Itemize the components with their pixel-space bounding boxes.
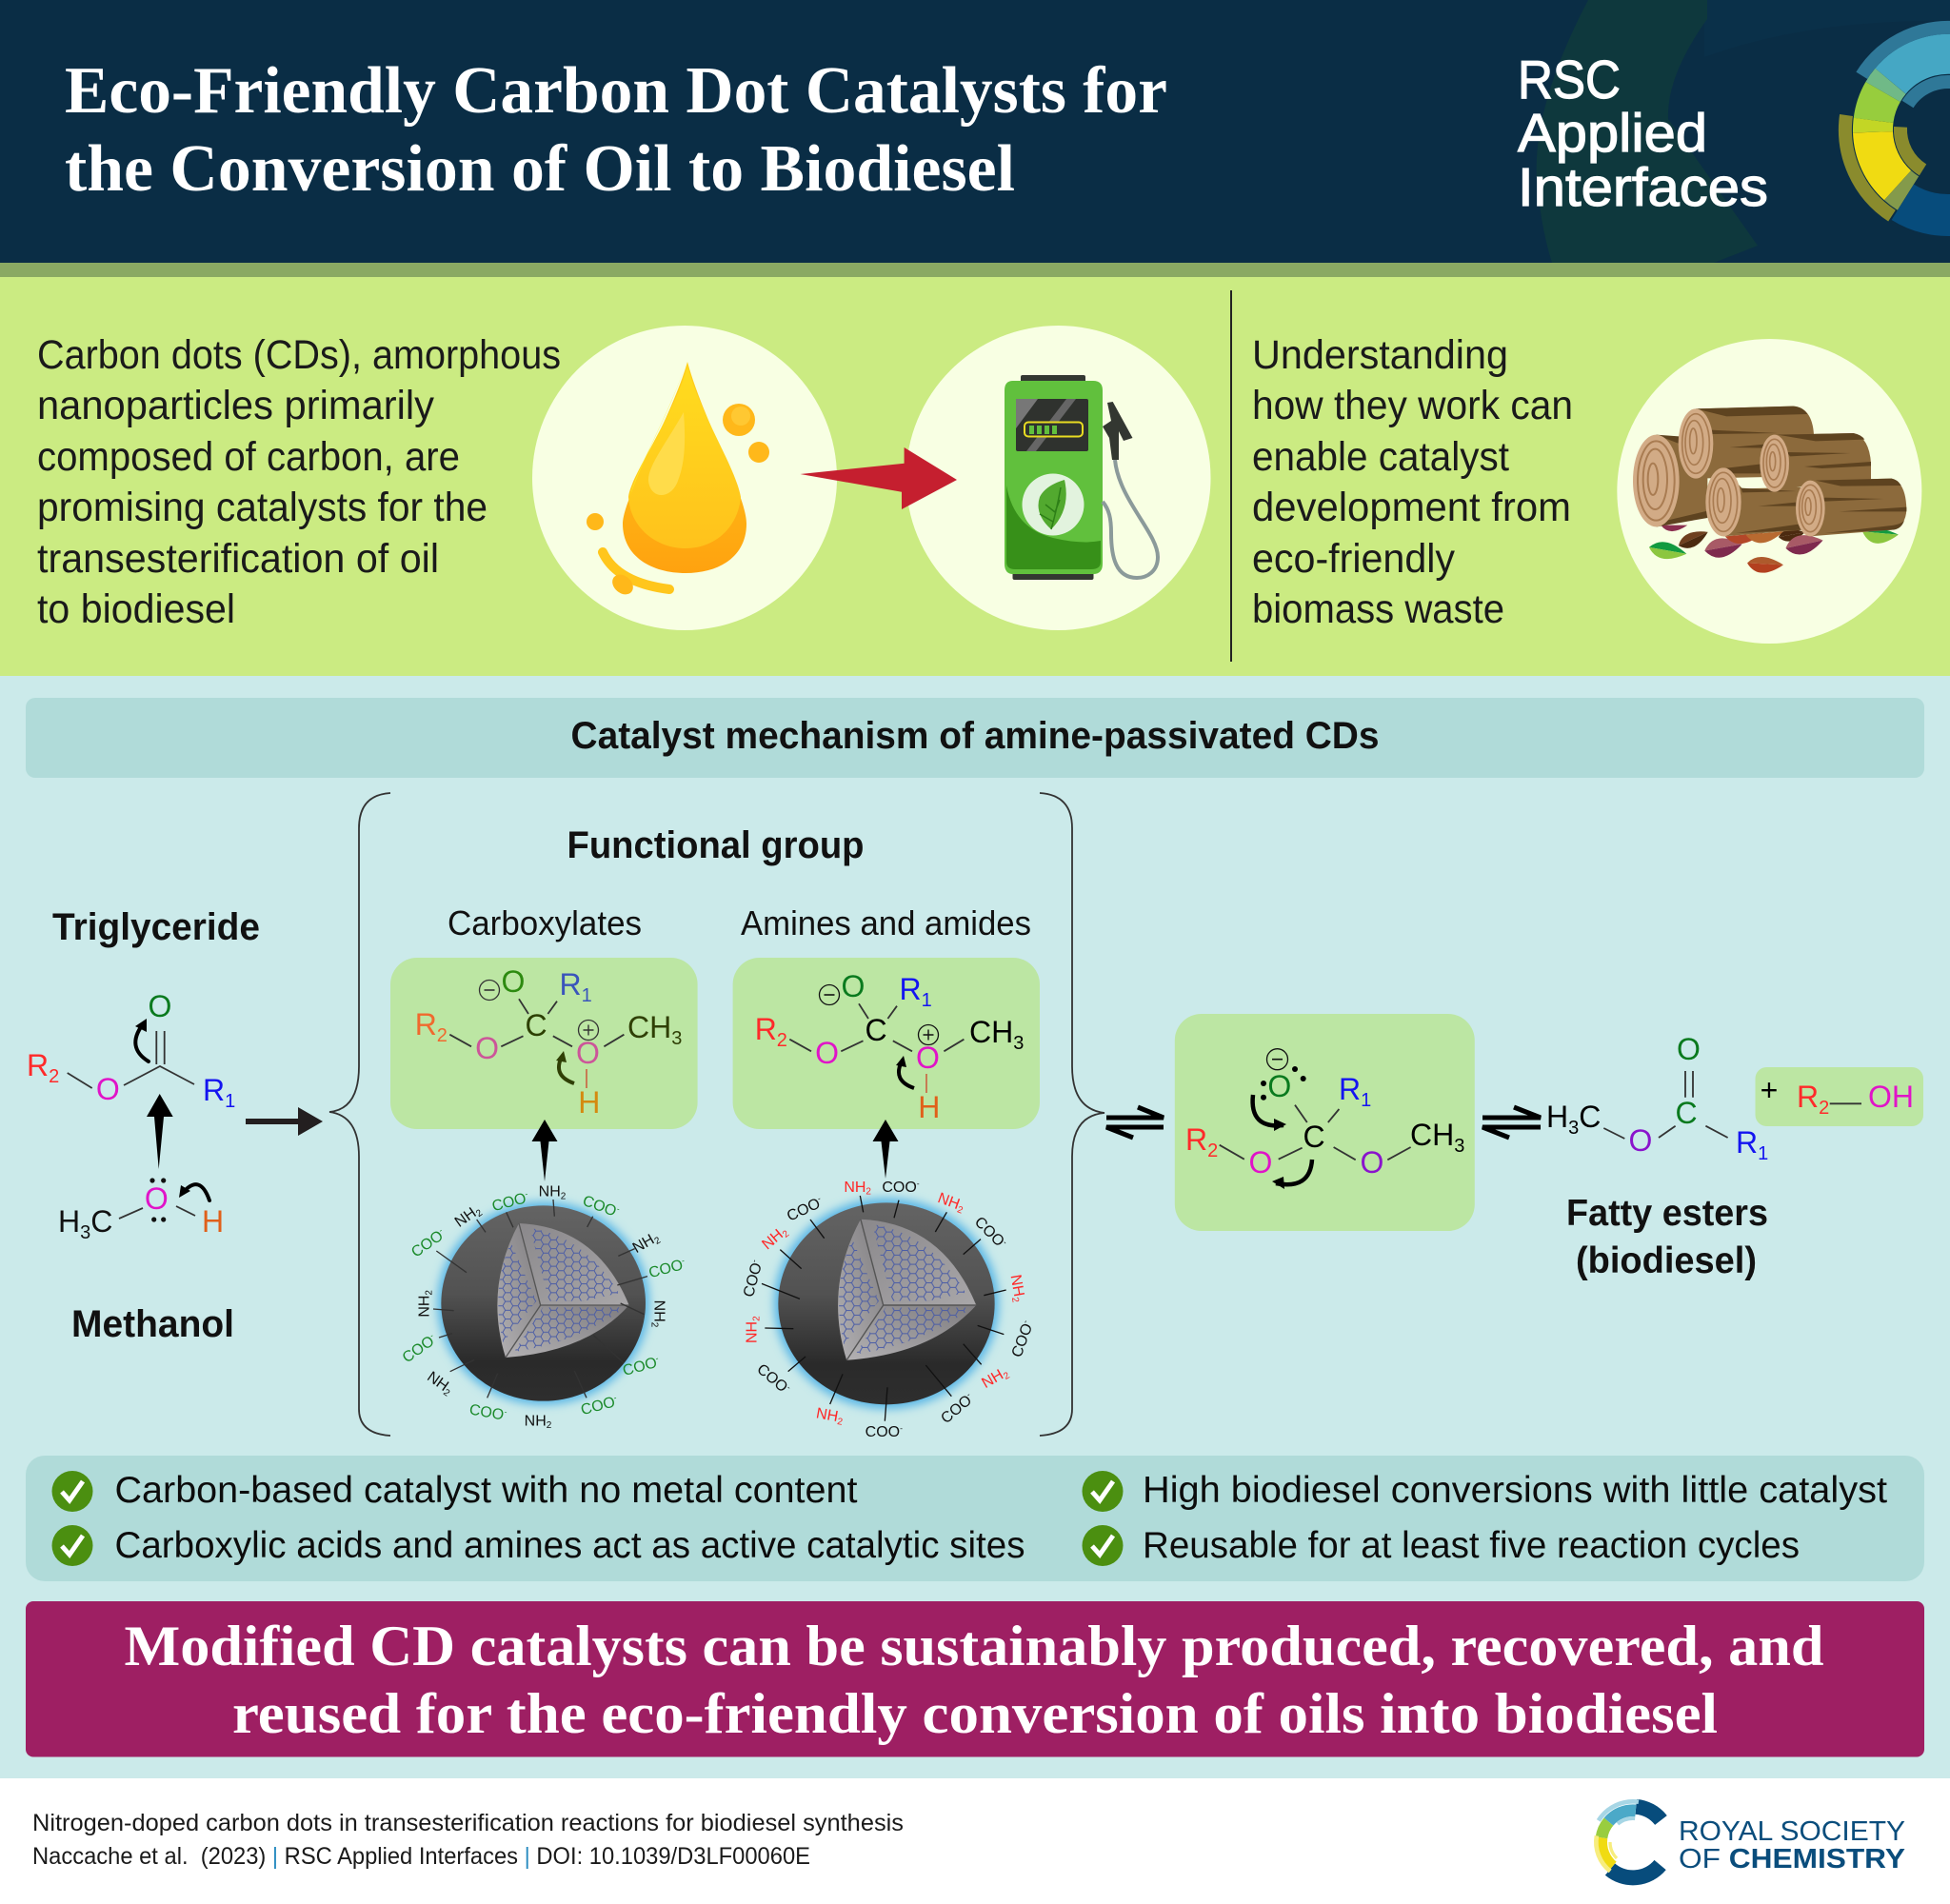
panel: tetrahedral intermediate: 1 bbox=[1361, 1090, 1371, 1111]
label: triglyceride: Triglyceride bbox=[52, 906, 260, 948]
panel: carboxylate intermediate: O bbox=[502, 964, 525, 999]
arrow: methanol attacks carbonyl bbox=[147, 1094, 173, 1169]
panel: tetrahedral intermediate: R bbox=[1185, 1122, 1207, 1157]
panel: tetrahedral intermediate: O bbox=[1267, 1069, 1291, 1103]
arrow: carboxylate carbon dot to intermediate bbox=[531, 1120, 558, 1181]
title bbox=[65, 54, 1167, 206]
carbon dot: red amine labels: COO bbox=[753, 1361, 790, 1396]
carbon dot: green carboxylate labels: - bbox=[615, 1204, 622, 1214]
molecule: methanol: H bbox=[58, 1204, 80, 1239]
carbon dot: red amine labels: COO bbox=[741, 1261, 766, 1299]
citation: Naccache et al. (2023) | RSC Applied Interfaces | DOI: 10.1039/D3LF00060E bbox=[32, 1843, 810, 1870]
panel: amine intermediate: 2 bbox=[777, 1030, 787, 1051]
citation bbox=[32, 1810, 904, 1870]
carbon dot: red amine labels: 2 bbox=[1009, 1297, 1021, 1304]
logo: Royal Society of Chemistry: ROYAL SOCIETY bbox=[1679, 1816, 1905, 1847]
carbon dot: green carboxylate labels: NH bbox=[424, 1369, 451, 1395]
carbon dot: red amine labels: 2 bbox=[751, 1316, 762, 1321]
panel: mechanism background bbox=[0, 676, 1950, 1778]
label: fatty esters biodiesel: Fatty esters bbox=[1566, 1193, 1768, 1234]
carbon dot: green carboxylate labels: 2 bbox=[653, 1235, 663, 1247]
carbon dot: red amine labels: NH bbox=[844, 1180, 866, 1196]
icon: oil drop in circle bbox=[532, 326, 837, 630]
carbon dot: red amine labels: COO bbox=[971, 1214, 1007, 1250]
panel: carboxylate intermediate: 2 bbox=[437, 1025, 448, 1046]
panel: amine intermediate: CH bbox=[969, 1015, 1013, 1049]
heading: catalyst mechanism bbox=[26, 698, 1924, 778]
arrow: amine carbon dot to intermediate bbox=[872, 1120, 899, 1179]
molecule: methanol bbox=[58, 1178, 224, 1243]
molecule: fatty ester: 3 bbox=[1568, 1118, 1579, 1139]
carbon dot: green carboxylate labels: COO bbox=[621, 1355, 659, 1379]
carbon dot: green carboxylate labels: - bbox=[524, 1189, 528, 1199]
carbon dot: red amine labels: 2 bbox=[956, 1204, 965, 1217]
panel: carboxylate intermediate: O bbox=[576, 1036, 600, 1070]
text block: carbon dots intro: composed of carbon, are bbox=[37, 434, 460, 480]
text block: carbon dots intro: nanoparticles primarily bbox=[37, 383, 434, 428]
heading: catalyst mechanism: Catalyst mechanism of amine-passivated CDs bbox=[571, 715, 1379, 757]
panel: tetrahedral intermediate: C bbox=[1303, 1120, 1325, 1154]
carbon dot: red amine labels: NH bbox=[935, 1190, 962, 1213]
panel: key benefits bbox=[26, 1456, 1924, 1581]
arrow: reactants to catalyst bbox=[246, 1107, 323, 1136]
label: methanol: Methanol bbox=[71, 1303, 234, 1345]
divider bbox=[1230, 290, 1232, 662]
carbon dot: green carboxylate labels: - bbox=[681, 1256, 686, 1265]
label: fatty esters biodiesel bbox=[1566, 1193, 1768, 1281]
panel: carboxylate intermediate: R bbox=[560, 967, 582, 1002]
carbon dot: red amine labels: NH bbox=[745, 1321, 761, 1343]
carbon dot: red amine labels: COO bbox=[882, 1180, 917, 1196]
text block: biomass waste: biomass waste bbox=[1252, 586, 1504, 632]
molecule: fatty ester: C bbox=[1675, 1096, 1698, 1130]
banner: conclusion bbox=[26, 1601, 1924, 1757]
carbon dot: red amine labels: NH bbox=[979, 1367, 1006, 1392]
panel: amine intermediate: 1 bbox=[922, 990, 932, 1011]
panel: amine intermediate: O bbox=[916, 1041, 940, 1075]
journal name: RSC Applied Interfaces: RSC bbox=[1518, 50, 1621, 110]
molecule: methanol: 3 bbox=[80, 1222, 90, 1243]
carbon dot: green carboxylate labels: COO bbox=[647, 1257, 685, 1281]
text block: carbon dots intro bbox=[37, 332, 561, 632]
benefit: active sites: Carboxylic acids and amines act as active catalytic sites bbox=[114, 1525, 1025, 1566]
panel: carboxylate intermediate: O bbox=[475, 1031, 499, 1065]
carbon dot: red amine labels: - bbox=[917, 1179, 920, 1188]
carbon dot: green carboxylate labels: - bbox=[504, 1407, 508, 1417]
panel: tetrahedral intermediate: R bbox=[1339, 1072, 1361, 1106]
molecule: fatty ester: 1 bbox=[1758, 1143, 1768, 1164]
carbon dot: red amine labels bbox=[740, 1179, 1037, 1440]
panel: amine intermediate: 3 bbox=[1013, 1033, 1024, 1054]
panel: carboxylate intermediate: C bbox=[525, 1008, 547, 1042]
panel: carboxylate intermediate: 3 bbox=[671, 1028, 682, 1049]
banner: conclusion: reused for the eco-friendly conversion of oils into biodiesel bbox=[232, 1682, 1718, 1745]
benefit: high conversions: High biodiesel conversions with little catalyst bbox=[1143, 1470, 1887, 1511]
carbon dot: red amine labels: 2 bbox=[781, 1228, 792, 1240]
molecule: fatty ester: H bbox=[1546, 1100, 1568, 1134]
carbon dot: green carboxylate labels: COO bbox=[580, 1193, 619, 1220]
panel: carboxylate intermediate: R bbox=[415, 1007, 437, 1041]
text block: biomass waste: enable catalyst bbox=[1252, 434, 1509, 480]
carbon dot: red amine labels: COO bbox=[785, 1196, 823, 1225]
carbon dot: green carboxylate labels: 2 bbox=[561, 1191, 567, 1201]
carbon dot: green carboxylate labels: 2 bbox=[547, 1420, 552, 1431]
panel: carboxylate intermediate: H bbox=[578, 1085, 600, 1120]
carbon dot: green carboxylate labels: 2 bbox=[649, 1322, 660, 1328]
label: amines and amides: Amines and amides bbox=[741, 903, 1031, 942]
text block: biomass waste: how they work can bbox=[1252, 383, 1573, 428]
carbon dot: green carboxylate labels: 2 bbox=[474, 1207, 485, 1220]
carbon dot: red amine labels: - bbox=[748, 1259, 759, 1263]
text block: carbon dots intro: transesterification of oil bbox=[37, 536, 439, 582]
panel: tetrahedral intermediate: CH bbox=[1410, 1118, 1454, 1152]
molecule: triglyceride: R bbox=[27, 1048, 49, 1082]
carbon dot: red amine labels: - bbox=[785, 1382, 793, 1392]
title: Eco-Friendly Carbon Dot Catalysts for bbox=[65, 54, 1167, 128]
panel: tetrahedral intermediate bbox=[1175, 1014, 1475, 1231]
header band bbox=[0, 0, 1950, 277]
carbon dot: green carboxylate labels: COO bbox=[468, 1401, 505, 1424]
carbon dot: green carboxylate labels: NH bbox=[630, 1232, 657, 1257]
carbon dot: green carboxylate labels: COO bbox=[579, 1394, 617, 1418]
carbon dot: green carboxylate labels: NH bbox=[650, 1300, 667, 1322]
molecule: methanol: H bbox=[202, 1204, 224, 1239]
molecule: triglyceride: 2 bbox=[49, 1066, 59, 1087]
panel: carboxylate intermediate: 1 bbox=[582, 985, 592, 1006]
banner: conclusion: Modified CD catalysts can be sustainably produced, recovered, and bbox=[124, 1615, 1824, 1677]
molecule: fatty ester bbox=[1546, 1032, 1768, 1164]
arrow: equilibrium one bbox=[1106, 1107, 1164, 1138]
carbon dot: green carboxylate labels: NH bbox=[417, 1296, 433, 1318]
carbon dot: red amine labels: - bbox=[1020, 1319, 1030, 1324]
panel: carboxylate intermediate: CH bbox=[627, 1010, 671, 1044]
text block: biomass waste bbox=[1252, 332, 1573, 632]
brace: right bbox=[1040, 793, 1104, 1436]
benefit: no metal: Carbon-based catalyst with no metal content bbox=[114, 1470, 858, 1511]
logo: Royal Society of Chemistry: OF CHEMISTRY bbox=[1679, 1844, 1905, 1874]
carbon dot: green carboxylate labels: - bbox=[612, 1393, 618, 1402]
text block: biomass waste: Understanding bbox=[1252, 332, 1508, 378]
text block: carbon dots intro: promising catalysts for the bbox=[37, 485, 488, 530]
text block: biomass waste: development from bbox=[1252, 485, 1571, 530]
panel: amine intermediate: R bbox=[755, 1012, 777, 1046]
brace: left bbox=[329, 793, 390, 1436]
carbon dot: red amine labels: NH bbox=[759, 1226, 786, 1253]
panel: amine intermediate: H bbox=[918, 1090, 940, 1124]
panel: alcohol by-product bbox=[1756, 1067, 1923, 1126]
carbon dot: green carboxylate labels: 2 bbox=[441, 1387, 451, 1399]
carbon dot: green carboxylate labels: COO bbox=[408, 1228, 447, 1261]
icon: journal ring logo bbox=[1845, 28, 1950, 216]
benefit: reusable: Reusable for at least five reaction cycles bbox=[1143, 1525, 1800, 1566]
molecule: fatty ester: O bbox=[1677, 1032, 1701, 1066]
carbon dot: green carboxylate labels: - bbox=[436, 1225, 445, 1235]
molecule: triglyceride: O bbox=[96, 1072, 120, 1106]
panel: tetrahedral intermediate: 2 bbox=[1207, 1140, 1218, 1161]
journal name: RSC Applied Interfaces: Applied bbox=[1518, 103, 1707, 164]
molecule: fatty ester: O bbox=[1629, 1123, 1652, 1158]
panel: introduction background bbox=[0, 277, 1950, 676]
carbon dot: green carboxylate labels: COO bbox=[490, 1190, 528, 1215]
label: fatty esters biodiesel: (biodiesel) bbox=[1576, 1240, 1757, 1281]
title: the Conversion of Oil to Biodiesel bbox=[65, 132, 1015, 206]
carbon dot: red amine labels: - bbox=[1001, 1238, 1010, 1246]
carbon dot: green carboxylate labels bbox=[399, 1184, 687, 1431]
panel: alcohol by-product: OH bbox=[1868, 1080, 1914, 1114]
citation: Nitrogen-doped carbon dots in transesterification reactions for biodiesel synthesis bbox=[32, 1810, 904, 1836]
logo: Royal Society of Chemistry bbox=[1596, 1801, 1905, 1877]
panel: alcohol by-product: R bbox=[1797, 1080, 1819, 1114]
panel: amine intermediate: O bbox=[842, 969, 865, 1003]
carbon dot: red amine labels: COO bbox=[1009, 1321, 1036, 1359]
panel: amine intermediate bbox=[733, 958, 1040, 1129]
journal name: RSC Applied Interfaces bbox=[1518, 50, 1768, 218]
carbon dot: green carboxylate labels: 2 bbox=[424, 1290, 434, 1296]
molecule: triglyceride: R bbox=[203, 1073, 225, 1107]
carbon dot: red amine labels: 2 bbox=[866, 1187, 871, 1198]
carbon dot: green carboxylate labels: NH bbox=[452, 1205, 479, 1231]
carbon dot: red amine labels: 2 bbox=[1002, 1370, 1012, 1382]
carbon dot: red amine labels: - bbox=[965, 1390, 972, 1398]
molecule: fatty ester: R bbox=[1736, 1125, 1758, 1160]
panel: amine intermediate: C bbox=[865, 1013, 887, 1047]
arrow: oil to fuel bbox=[800, 447, 957, 509]
label: carboxylates: Carboxylates bbox=[448, 903, 642, 942]
arrow: equilibrium two bbox=[1482, 1107, 1541, 1138]
carbon dot: red amine labels: - bbox=[900, 1423, 903, 1433]
heading: functional group: Functional group bbox=[567, 824, 865, 866]
panel: tetrahedral intermediate: 3 bbox=[1454, 1136, 1464, 1157]
molecule: triglyceride: 1 bbox=[225, 1091, 235, 1112]
carbon dot: red amine labels: NH bbox=[815, 1405, 840, 1425]
carbon dot: red amine labels: - bbox=[816, 1194, 823, 1203]
molecule: methanol: C bbox=[90, 1204, 112, 1239]
carbon dot: green carboxylate labels: NH bbox=[525, 1413, 547, 1429]
text block: biomass waste: eco-friendly bbox=[1252, 536, 1455, 582]
journal name: RSC Applied Interfaces: Interfaces bbox=[1518, 157, 1768, 218]
icon: logs and leaves in circle bbox=[1617, 339, 1921, 644]
panel: carboxylate intermediate bbox=[390, 958, 698, 1129]
carbon dot: green carboxylate labels: - bbox=[654, 1353, 660, 1363]
panel: amine intermediate: O bbox=[815, 1036, 839, 1070]
carbon dot: green carboxylate labels: COO bbox=[400, 1333, 437, 1366]
icon: green fuel pump in circle bbox=[906, 326, 1211, 630]
carbon dot: red amine labels: 2 bbox=[836, 1417, 844, 1428]
panel: tetrahedral intermediate: O bbox=[1361, 1145, 1383, 1180]
carbon dot: green carboxylate labels: - bbox=[428, 1331, 435, 1340]
text block: carbon dots intro: to biodiesel bbox=[37, 586, 235, 632]
carbon dot: red amine labels: NH bbox=[1007, 1274, 1026, 1298]
molecule: triglyceride bbox=[27, 989, 235, 1112]
panel: alcohol by-product: 2 bbox=[1819, 1098, 1829, 1119]
carbon dot: red amine labels: COO bbox=[866, 1424, 900, 1440]
molecule: methanol: O bbox=[145, 1181, 169, 1216]
text block: carbon dots intro: Carbon dots (CDs), amorphous bbox=[37, 332, 561, 378]
carbon dot: red amine labels: COO bbox=[938, 1393, 975, 1427]
molecule: triglyceride: O bbox=[149, 989, 171, 1023]
panel: amine intermediate: R bbox=[899, 972, 922, 1006]
carbon dot: green carboxylate labels: NH bbox=[539, 1184, 561, 1200]
panel: alcohol by-product: + bbox=[1761, 1073, 1778, 1107]
molecule: fatty ester: C bbox=[1579, 1100, 1601, 1134]
panel: tetrahedral intermediate: O bbox=[1249, 1145, 1272, 1180]
footer background bbox=[0, 1778, 1950, 1904]
